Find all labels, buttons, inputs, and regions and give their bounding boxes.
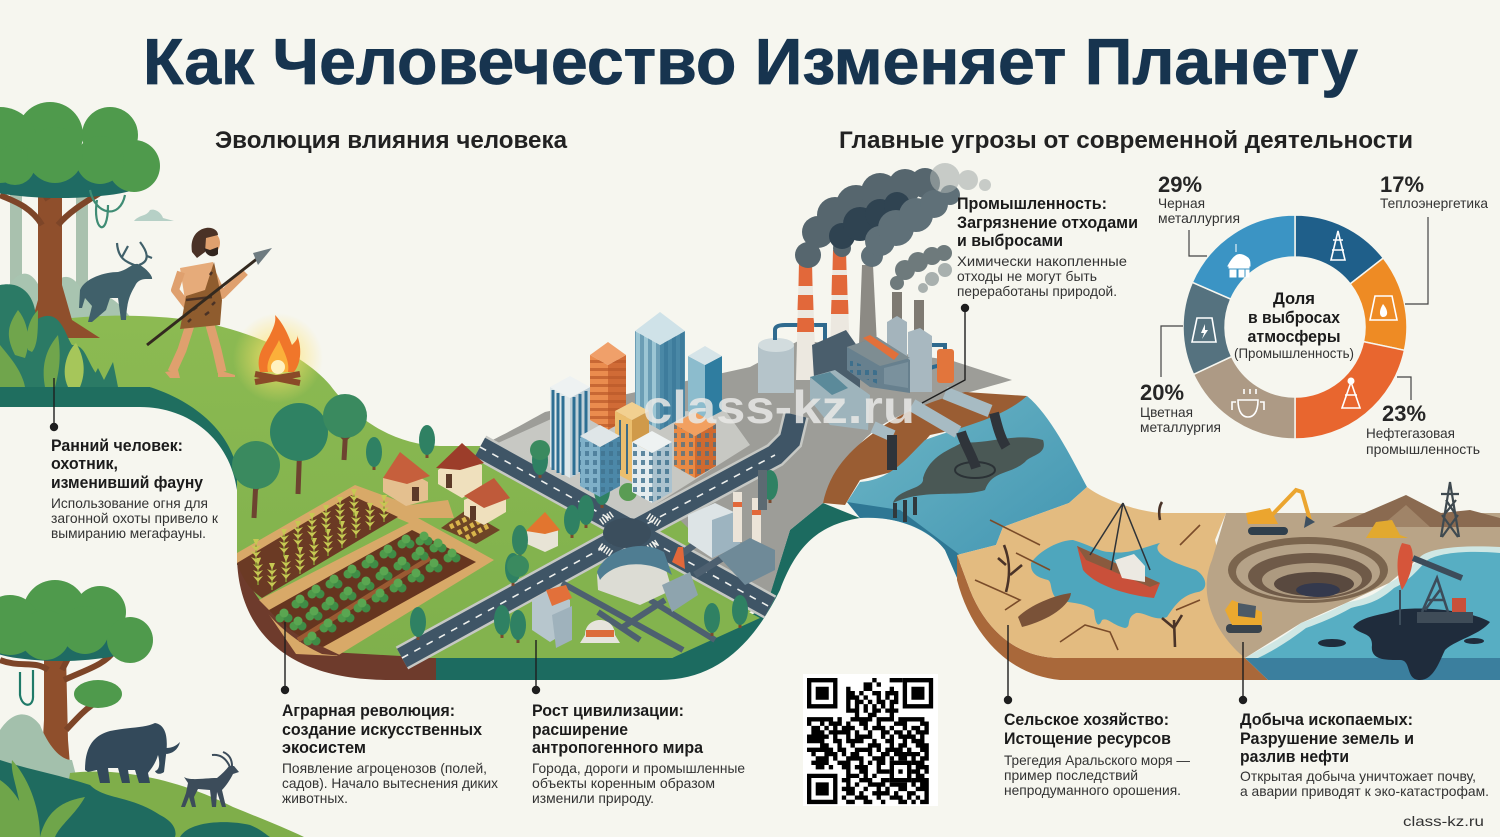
text block: mining: а аварии приводят к эко-катастрофам.: [1240, 783, 1489, 799]
qr code: [803, 674, 938, 806]
text block: civilization: расширение: [532, 720, 628, 739]
right land: [957, 482, 1500, 680]
text block: agriculture: [1004, 710, 1190, 798]
trees: [232, 394, 778, 643]
excavator: [1246, 490, 1315, 535]
farmland paths: [237, 485, 494, 656]
text block: civilization: антропогенного мира: [532, 738, 704, 757]
tower: orange small: [674, 412, 716, 478]
beard: [204, 247, 218, 256]
cabin: [526, 512, 560, 552]
water basin: [823, 392, 1087, 580]
text block: early human: изменивший фауну: [51, 473, 203, 492]
tunic: [180, 262, 222, 329]
cracks: [975, 520, 1200, 650]
big tree bottom: [0, 580, 153, 790]
text block: mining: Добыча ископаемых:: [1240, 710, 1413, 729]
cloud: [134, 210, 174, 221]
oil slick: [893, 437, 1044, 503]
label 20%: металлургия: [1140, 419, 1221, 435]
soil strip: [255, 596, 342, 656]
lower factory quarter: [532, 546, 698, 648]
front building: [810, 370, 870, 430]
text block: early human: вымиранию мегафауны.: [51, 525, 206, 541]
label 29%: Черная: [1158, 195, 1205, 211]
text block: civilization: объекты коренным образом: [532, 775, 715, 791]
text block: mining: разлив нефти: [1240, 747, 1349, 766]
text block: early human: охотник,: [51, 454, 118, 473]
segment: dark blue: [1295, 215, 1383, 284]
field: crops: [269, 530, 476, 647]
segment: blue: [1192, 215, 1295, 299]
label 29%: металлургия: [1158, 210, 1240, 226]
land: green surface: [0, 316, 770, 658]
surface: quarry ground: [1207, 513, 1500, 658]
label 17%: 17%: [1380, 172, 1424, 197]
factory: [758, 163, 1006, 470]
label 23%: Нефтегазовая: [1366, 425, 1455, 441]
text block: agriculture: пример последствий: [1004, 767, 1138, 783]
elephant: [85, 723, 180, 783]
footer: class-kz.ru: [1403, 813, 1484, 829]
crosswalks: [600, 514, 660, 554]
boat: [1077, 503, 1160, 598]
branches: [0, 645, 115, 730]
title: Как Человечество Изменяет Планету: [143, 25, 1358, 98]
plants top: [0, 284, 118, 387]
front: soil: [237, 555, 436, 680]
text block: agriculture revolution: животных.: [282, 790, 348, 806]
text block: mining: Открытая добыча уничтожает почву,: [1240, 768, 1476, 784]
text block: early human: Использование огня для: [51, 495, 208, 511]
deer: [79, 242, 152, 322]
derrick: [1441, 482, 1459, 537]
tower: orange tall: [590, 342, 626, 430]
lower quarter: green: [405, 545, 760, 658]
tower: glass: [635, 312, 685, 430]
caveman: [147, 228, 272, 378]
segment: red orange: [1295, 342, 1404, 439]
discharge: [892, 413, 1006, 470]
stacks: [887, 292, 932, 392]
pipes: [873, 393, 990, 436]
canopy: [0, 580, 153, 663]
house 3: [464, 478, 510, 525]
label 17%: [1380, 172, 1488, 211]
pipes blue: [775, 325, 945, 375]
mountains: [1332, 495, 1500, 527]
text block: civilization: изменили природу.: [532, 790, 654, 806]
block: city sidewalk: [498, 410, 750, 518]
label 29%: 29%: [1158, 172, 1202, 197]
oil spill: [1353, 608, 1490, 680]
text block: agriculture revolution: садов). Начало вытеснения диких: [282, 775, 498, 791]
text block: civilization: Города, дороги и промышленные: [532, 760, 745, 776]
center label: [1234, 289, 1354, 361]
text block: mining: Разрушение земель и: [1240, 729, 1414, 748]
city: [550, 312, 722, 503]
crossing: [603, 518, 651, 548]
feet: [165, 370, 235, 378]
dead trees: [998, 502, 1182, 647]
chimney 1: [796, 262, 816, 380]
text block: industry: и выбросами: [957, 231, 1063, 250]
mark: callout lines: [50, 304, 1246, 704]
text block: civilization: Рост цивилизации:: [532, 701, 684, 720]
text block: industry: Промышленность:: [957, 194, 1107, 213]
torso: [180, 262, 216, 300]
patch: green by factory: [652, 520, 700, 552]
text block: industry: отходы не могут быть: [957, 268, 1097, 284]
label 20%: 20%: [1140, 380, 1184, 405]
center label: (Промышленность): [1234, 345, 1354, 361]
tower: blue short: [580, 425, 620, 497]
goat: [181, 752, 239, 807]
text block: mining: [1240, 710, 1489, 799]
back forest: [0, 190, 135, 325]
text block: agriculture revolution: Аграрная революция:: [282, 701, 455, 720]
label 17%: Теплоэнергетика: [1380, 195, 1488, 211]
text block: industry: [957, 194, 1138, 299]
text block: agriculture revolution: создание искусственных: [282, 720, 483, 739]
pumpjack: [1398, 543, 1473, 625]
text block: agriculture: Сельское хозяйство:: [1004, 710, 1169, 729]
text block: early human: Ранний человек:: [51, 436, 183, 455]
roads: [402, 415, 796, 658]
chimney 2: [830, 250, 850, 355]
text block: agriculture: Трегедия Аральского моря —: [1004, 752, 1190, 768]
hill bottom: [0, 714, 304, 837]
patch: pumpkins: [441, 510, 500, 544]
text block: agriculture revolution: Появление агроценозов (полей,: [282, 760, 487, 776]
band: forest edge: [0, 387, 245, 565]
small boat: [1018, 593, 1071, 627]
text block: industry: Химически накопленные: [957, 253, 1127, 269]
watermark: class-kz.ru: [643, 381, 915, 433]
text block: agriculture revolution: экосистем: [282, 738, 366, 757]
text block: early human: загонной охоты привело к: [51, 510, 219, 526]
chimney 3: [859, 265, 877, 345]
text block: agriculture: Истощение ресурсов: [1004, 729, 1171, 748]
dozer small: [1366, 520, 1408, 538]
segment: tan: [1194, 357, 1295, 439]
pit: [1228, 537, 1388, 603]
label 23%: промышленность: [1366, 441, 1480, 457]
tank: [758, 338, 794, 393]
branches: [0, 165, 122, 225]
orange tank: [937, 349, 954, 383]
label 20%: [1140, 380, 1221, 435]
big tree top: [0, 102, 160, 338]
text block: civilization: [532, 701, 745, 806]
small canopy: [74, 680, 122, 708]
center label: атмосферы: [1248, 327, 1340, 346]
canopy: [0, 102, 160, 198]
head: [202, 232, 220, 254]
right water front: [1245, 658, 1500, 680]
hair: [192, 228, 218, 258]
front: teal: [436, 503, 860, 680]
leader lines: [1161, 217, 1428, 400]
label 23%: [1366, 401, 1480, 457]
segment: orange: [1350, 258, 1407, 350]
right water: [1245, 546, 1500, 658]
trunk: [40, 655, 72, 790]
vine: [20, 670, 33, 705]
house 2: [436, 443, 484, 498]
vine: [90, 190, 125, 227]
donut chart: [1140, 172, 1488, 457]
sand: [957, 487, 1245, 658]
legs: [172, 325, 222, 372]
text block: industry: переработаны природой.: [957, 283, 1117, 299]
segment: slate: [1183, 282, 1232, 374]
center label: в выбросах: [1248, 308, 1340, 327]
smoke: [795, 163, 991, 293]
text block: agriculture: непродуманного орошения.: [1004, 782, 1181, 798]
dozer: [1225, 600, 1262, 633]
swirl: [955, 462, 995, 478]
label 20%: Цветная: [1140, 404, 1193, 420]
slick drips: [895, 497, 915, 522]
spear tip: [253, 248, 272, 265]
field: corn: [237, 489, 398, 598]
tower: white short: [632, 431, 672, 503]
tower: yellow: [615, 402, 649, 482]
campfire: [233, 313, 323, 403]
shore: [823, 392, 1027, 505]
trunk: [27, 190, 100, 338]
heading: evolution: Эволюция влияния человека: [215, 127, 568, 154]
center label: Доля: [1273, 289, 1315, 308]
label 29%: [1158, 172, 1240, 226]
text block: early human: [51, 436, 219, 541]
heading: threats: Главные угрозы от современной деятельности: [839, 127, 1413, 154]
right factory quarter: [688, 470, 775, 585]
front water: [847, 502, 960, 580]
spear: [147, 258, 258, 345]
arms: [175, 272, 245, 312]
base: brown: [957, 555, 1268, 680]
label 23%: 23%: [1382, 401, 1426, 426]
tower: white striped: [550, 376, 590, 478]
house 1: [383, 452, 430, 506]
blocks: [812, 330, 910, 400]
tower: right glass: [688, 346, 722, 420]
water: [847, 396, 1087, 580]
text block: industry: Загрязнение отходами: [957, 213, 1138, 232]
pond: [1031, 540, 1205, 628]
text block: agriculture revolution: [282, 701, 498, 806]
land: grey industrial: [480, 340, 1012, 607]
